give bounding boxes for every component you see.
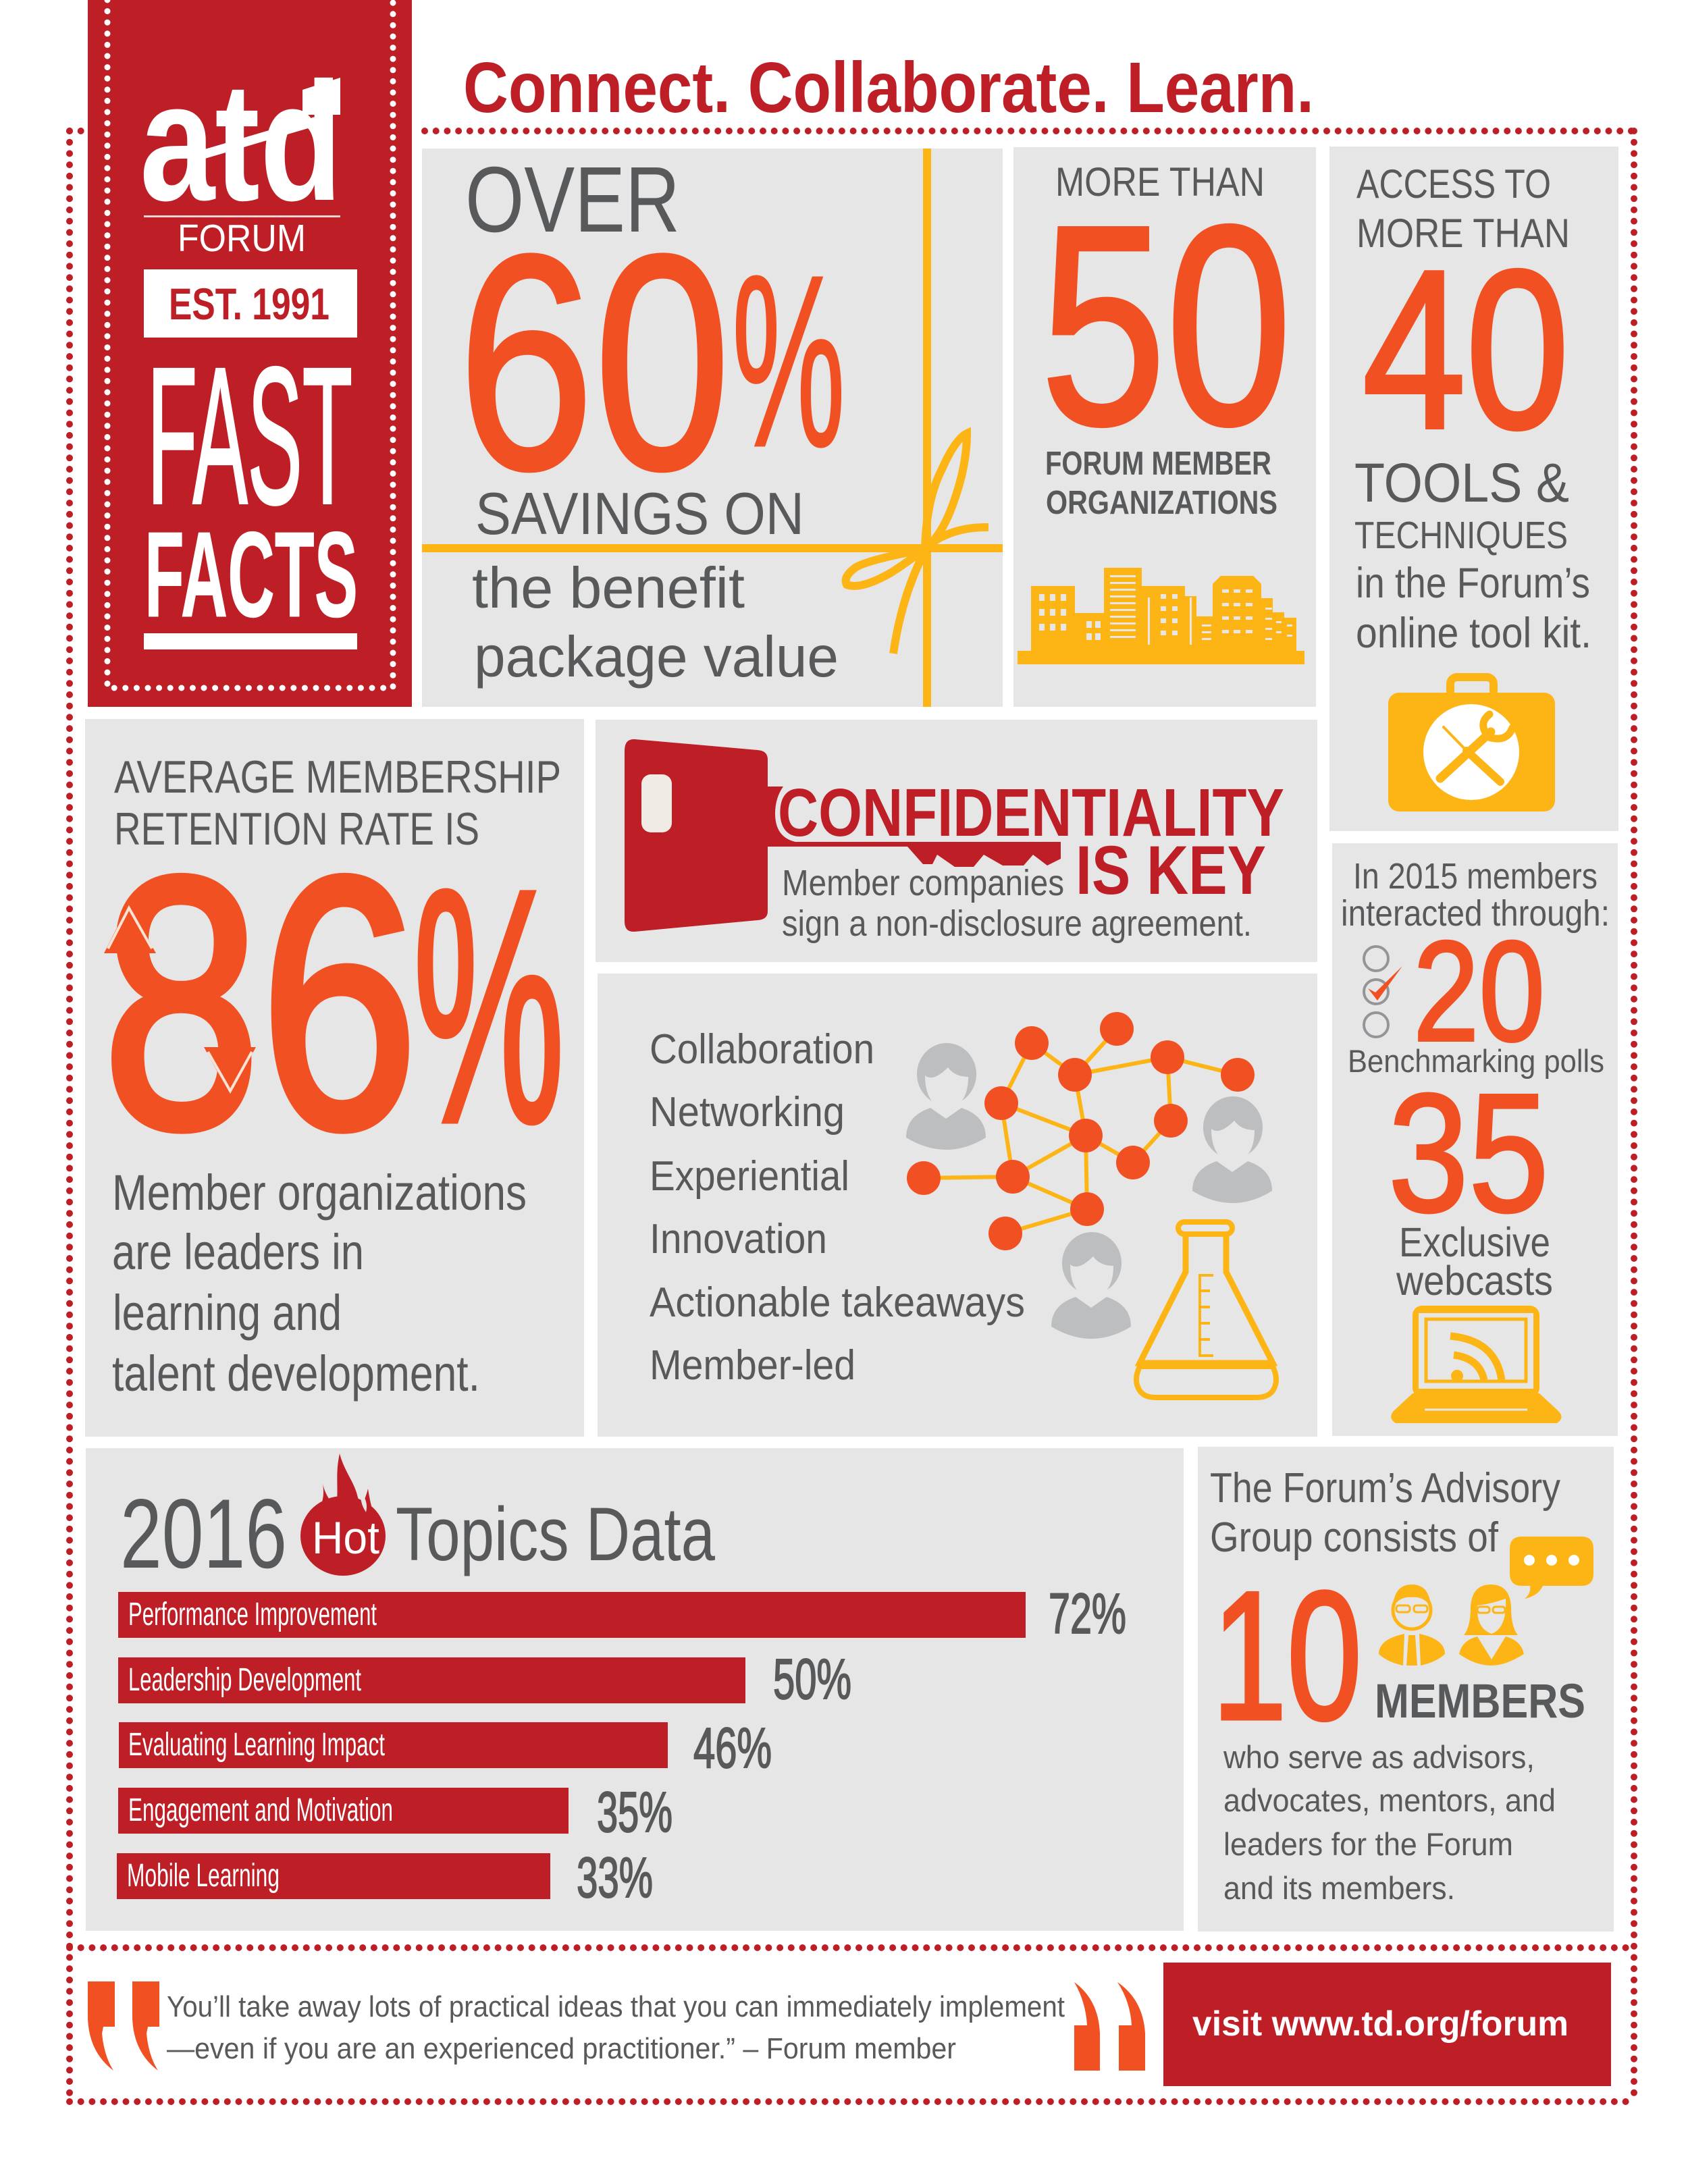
- label: over: OVER: [465, 148, 680, 252]
- icon: retention arrows: [104, 904, 256, 1095]
- heading: confidentiality: CONFIDENTIALITY: [778, 775, 1284, 851]
- label: members: MEMBERS: [1375, 1675, 1585, 1728]
- icon: male advisor: [1379, 1584, 1445, 1666]
- panel: advisory group: [1198, 1447, 1614, 1932]
- stat: 60: 60: [458, 192, 731, 533]
- label: access to more than: [1356, 161, 1570, 256]
- call to action: visit site: visit www.td.org/forum: [1192, 2004, 1568, 2044]
- quote marks left: [88, 1981, 159, 2071]
- bar: engagement and motivation: 35%: [597, 1780, 672, 1844]
- text: member organizations: Member organizations: [112, 1165, 527, 1221]
- text: who serve as advisors: who serve as advisors,: [1223, 1739, 1535, 1775]
- stat: 10: 10: [1212, 1554, 1362, 1758]
- label: forum member organizations: [1045, 446, 1277, 521]
- label: the benefit package value: package value: [474, 625, 839, 689]
- label: tools and techniques: TECHNIQUES: [1354, 514, 1568, 557]
- panel: 40 tools and techniques: [1329, 147, 1618, 831]
- panel: confidentiality is key: [596, 720, 1317, 962]
- bar: leadership development: 50%: [773, 1647, 851, 1711]
- label: average membership retention rate: RETENTION RATE IS: [114, 803, 479, 855]
- bar: evaluating learning impact: 46%: [693, 1716, 772, 1780]
- stat: percent sign: %: [732, 224, 845, 498]
- title: Connect. Collaborate. Learn.: [463, 48, 1314, 128]
- panel: 50 member organizations: [1013, 147, 1316, 707]
- bar: engagement and motivation: Engagement and Motivation: [128, 1792, 393, 1828]
- list: forum attributes: Networking: [650, 1089, 845, 1136]
- text: advisory group consists of: Group consists of: [1210, 1514, 1499, 1561]
- text: advisory group consists of: The Forum’s Advisory: [1210, 1465, 1560, 1512]
- icon: hot flame: [300, 1454, 386, 1576]
- panel: ATD Forum fast facts banner: [88, 0, 412, 707]
- panel: 2015 interactions: [1332, 843, 1618, 1436]
- diagram: network nodes: [907, 1012, 1255, 1250]
- label: access to more than: ACCESS TO: [1356, 161, 1551, 207]
- heading: topics data: Topics Data: [396, 1492, 716, 1576]
- logo rule: [144, 215, 340, 217]
- text: member organizations: are leaders in: [112, 1224, 364, 1280]
- stat: percent sign: %: [413, 821, 564, 1191]
- logo: atd: atd: [140, 47, 342, 236]
- text: member organizations: talent development.: [112, 1346, 480, 1402]
- label: forum member organizations: ORGANIZATIONS: [1046, 485, 1277, 521]
- label: tools and techniques: in the Forum’s: [1356, 560, 1590, 607]
- bar: mobile learning: [117, 1846, 653, 1909]
- underline bar: [144, 633, 357, 649]
- list: forum attributes: [650, 1026, 1025, 1389]
- text: member organizations: [112, 1165, 527, 1402]
- icon: flask: [1136, 1222, 1276, 1397]
- quote marks right: [1074, 1982, 1145, 2071]
- text: who serve as advisors: leaders for the Forum: [1223, 1826, 1513, 1862]
- text: who serve as advisors: advocates, mentors, and: [1223, 1782, 1556, 1818]
- bar: performance improvement: [118, 1582, 1126, 1645]
- heading: 2016: 2016: [120, 1479, 287, 1589]
- bar: leadership development: Leadership Development: [128, 1662, 361, 1698]
- gift ribbon: [422, 149, 1003, 707]
- text: in 2015 members interacted through: [1341, 856, 1610, 934]
- bar: mobile learning: 33%: [577, 1846, 653, 1909]
- text: in 2015 members interacted through: interacted through:: [1341, 893, 1610, 934]
- label: forum member organizations: FORUM MEMBER: [1045, 446, 1271, 482]
- testimonial quote: You’ll take away lots of practical ideas that you can immediately implement: [167, 1990, 1065, 2023]
- stat: 35: 35: [1388, 1059, 1549, 1247]
- panel: 60 percent savings: [422, 148, 1003, 707]
- text: in 2015 members interacted through: In 2015 members: [1353, 856, 1598, 897]
- label: access to more than: MORE THAN: [1356, 211, 1570, 256]
- stat: 20: 20: [1413, 911, 1545, 1071]
- bar: engagement and motivation: [118, 1780, 672, 1844]
- panel: collaboration network: [598, 974, 1317, 1437]
- label: average membership retention rate: AVERAGE MEMBERSHIP: [114, 751, 561, 803]
- text: non-disclosure agreement: [782, 863, 1252, 944]
- icon: female advisor: [1459, 1584, 1524, 1666]
- established badge: [144, 269, 357, 338]
- label: more than: MORE THAN: [1055, 159, 1265, 205]
- label: the benefit package value: the benefit: [472, 556, 745, 620]
- stat: 50: 50: [1040, 167, 1292, 484]
- bar: mobile learning: Mobile Learning: [127, 1858, 280, 1894]
- bar chart: [117, 1582, 1126, 1909]
- list: forum attributes: Experiential: [650, 1153, 849, 1200]
- icon: people: [906, 1043, 1272, 1339]
- label: savings on: SAVINGS ON: [475, 480, 804, 547]
- bar: evaluating learning impact: Evaluating Learning Impact: [128, 1727, 385, 1763]
- icon: city skyline: [1018, 568, 1304, 664]
- testimonial quote: [167, 1990, 1065, 2065]
- list: forum attributes: Innovation: [650, 1216, 827, 1262]
- bar: performance improvement: 72%: [1049, 1582, 1126, 1645]
- label: tools and techniques: [1354, 452, 1591, 657]
- label: the benefit package value: [472, 556, 839, 689]
- list: forum attributes: Member-led: [650, 1342, 855, 1389]
- icon: poll checkboxes: [1364, 947, 1402, 1037]
- text: who serve as advisors: and its members.: [1223, 1870, 1455, 1906]
- label: benchmarking polls: Benchmarking polls: [1348, 1043, 1604, 1079]
- panel: retention rate: [85, 719, 584, 1437]
- heading: facts: FACTS: [144, 507, 358, 643]
- panel: 2016 hot topics data: [86, 1448, 1184, 1931]
- label: tools and techniques: TOOLS &: [1354, 452, 1569, 514]
- bar: evaluating learning impact: [119, 1716, 772, 1780]
- label: average membership retention rate: [114, 751, 561, 855]
- text: non-disclosure agreement: sign a non-disclosure agreement.: [782, 903, 1252, 944]
- text: non-disclosure agreement: Member companies: [782, 863, 1064, 903]
- stat: 86: 86: [103, 803, 418, 1202]
- label: exclusive webcasts: webcasts: [1396, 1258, 1553, 1304]
- text: member organizations: learning and: [113, 1285, 342, 1341]
- icon: key: [625, 739, 1061, 932]
- label: exclusive webcasts: Exclusive: [1399, 1219, 1550, 1265]
- icon: laptop with rss: [1391, 1306, 1562, 1423]
- icon: hot flame: Hot: [312, 1512, 379, 1564]
- panel: ATD Forum fast facts banner: FAST: [147, 327, 352, 545]
- list: forum attributes: Actionable takeaways: [650, 1279, 1025, 1326]
- testimonial quote: —even if you are an experienced practitioner.” – Forum member: [167, 2032, 956, 2065]
- list: forum attributes: Collaboration: [650, 1026, 874, 1073]
- icon: speech bubble: [1510, 1537, 1593, 1599]
- icon: toolbox: [1388, 677, 1555, 811]
- forum label: FORUM: [178, 217, 306, 260]
- call to action: visit site: [1163, 1963, 1611, 2086]
- bar: performance improvement: Performance Improvement: [128, 1597, 377, 1632]
- stat: 40: 40: [1363, 223, 1569, 475]
- text: who serve as advisors: [1223, 1739, 1556, 1906]
- established badge: EST. 1991: [169, 279, 329, 329]
- label: tools and techniques: online tool kit.: [1356, 610, 1591, 657]
- label: exclusive webcasts: [1396, 1219, 1553, 1304]
- bar: leadership development: [118, 1647, 851, 1711]
- text: advisory group consists of: [1210, 1465, 1560, 1561]
- heading: is key: IS KEY: [1076, 832, 1266, 909]
